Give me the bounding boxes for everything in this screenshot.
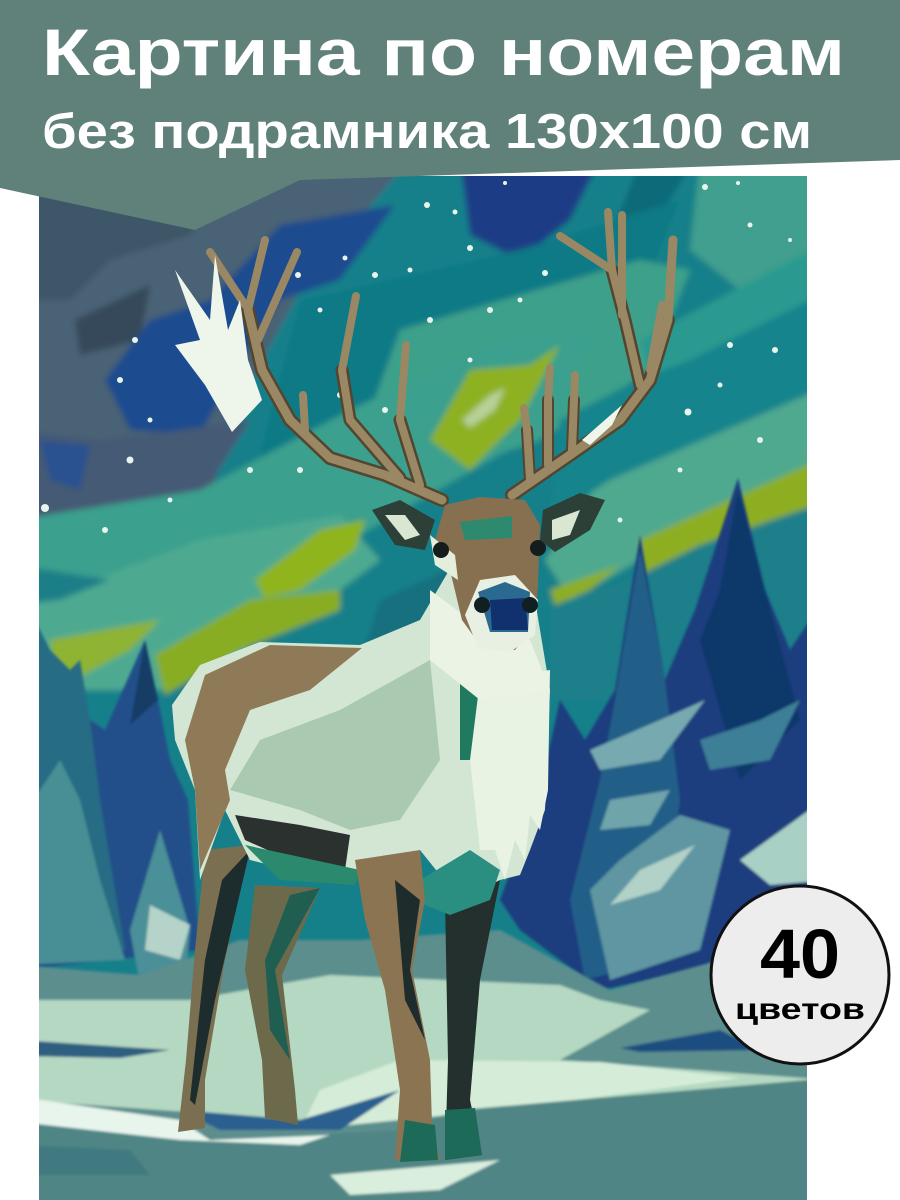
sky background	[39, 176, 807, 992]
head	[435, 497, 540, 650]
shaded fur	[230, 660, 440, 830]
badge: 40 colours: 40	[760, 915, 840, 993]
far legs	[178, 845, 500, 1160]
eyes	[433, 542, 449, 558]
chest fur	[470, 670, 550, 880]
subtitle: без подрамника 130х100 см	[42, 105, 812, 159]
near front leg	[355, 850, 440, 1160]
muzzle	[478, 582, 530, 632]
title: Картина по номерам	[42, 15, 845, 89]
brown back	[185, 645, 362, 870]
snow specks	[41, 181, 792, 533]
body	[172, 560, 550, 900]
badge: 40 colours: цветов	[735, 993, 865, 1026]
ears	[372, 500, 435, 550]
reindeer	[172, 212, 673, 1162]
forest left	[39, 626, 198, 976]
forest right	[500, 478, 830, 990]
snowy ground	[20, 930, 830, 1200]
antlers	[210, 212, 673, 500]
neck	[430, 590, 550, 700]
header banner	[0, 0, 900, 230]
badge: 40 colours	[711, 886, 889, 1064]
white antler tips	[175, 255, 622, 445]
